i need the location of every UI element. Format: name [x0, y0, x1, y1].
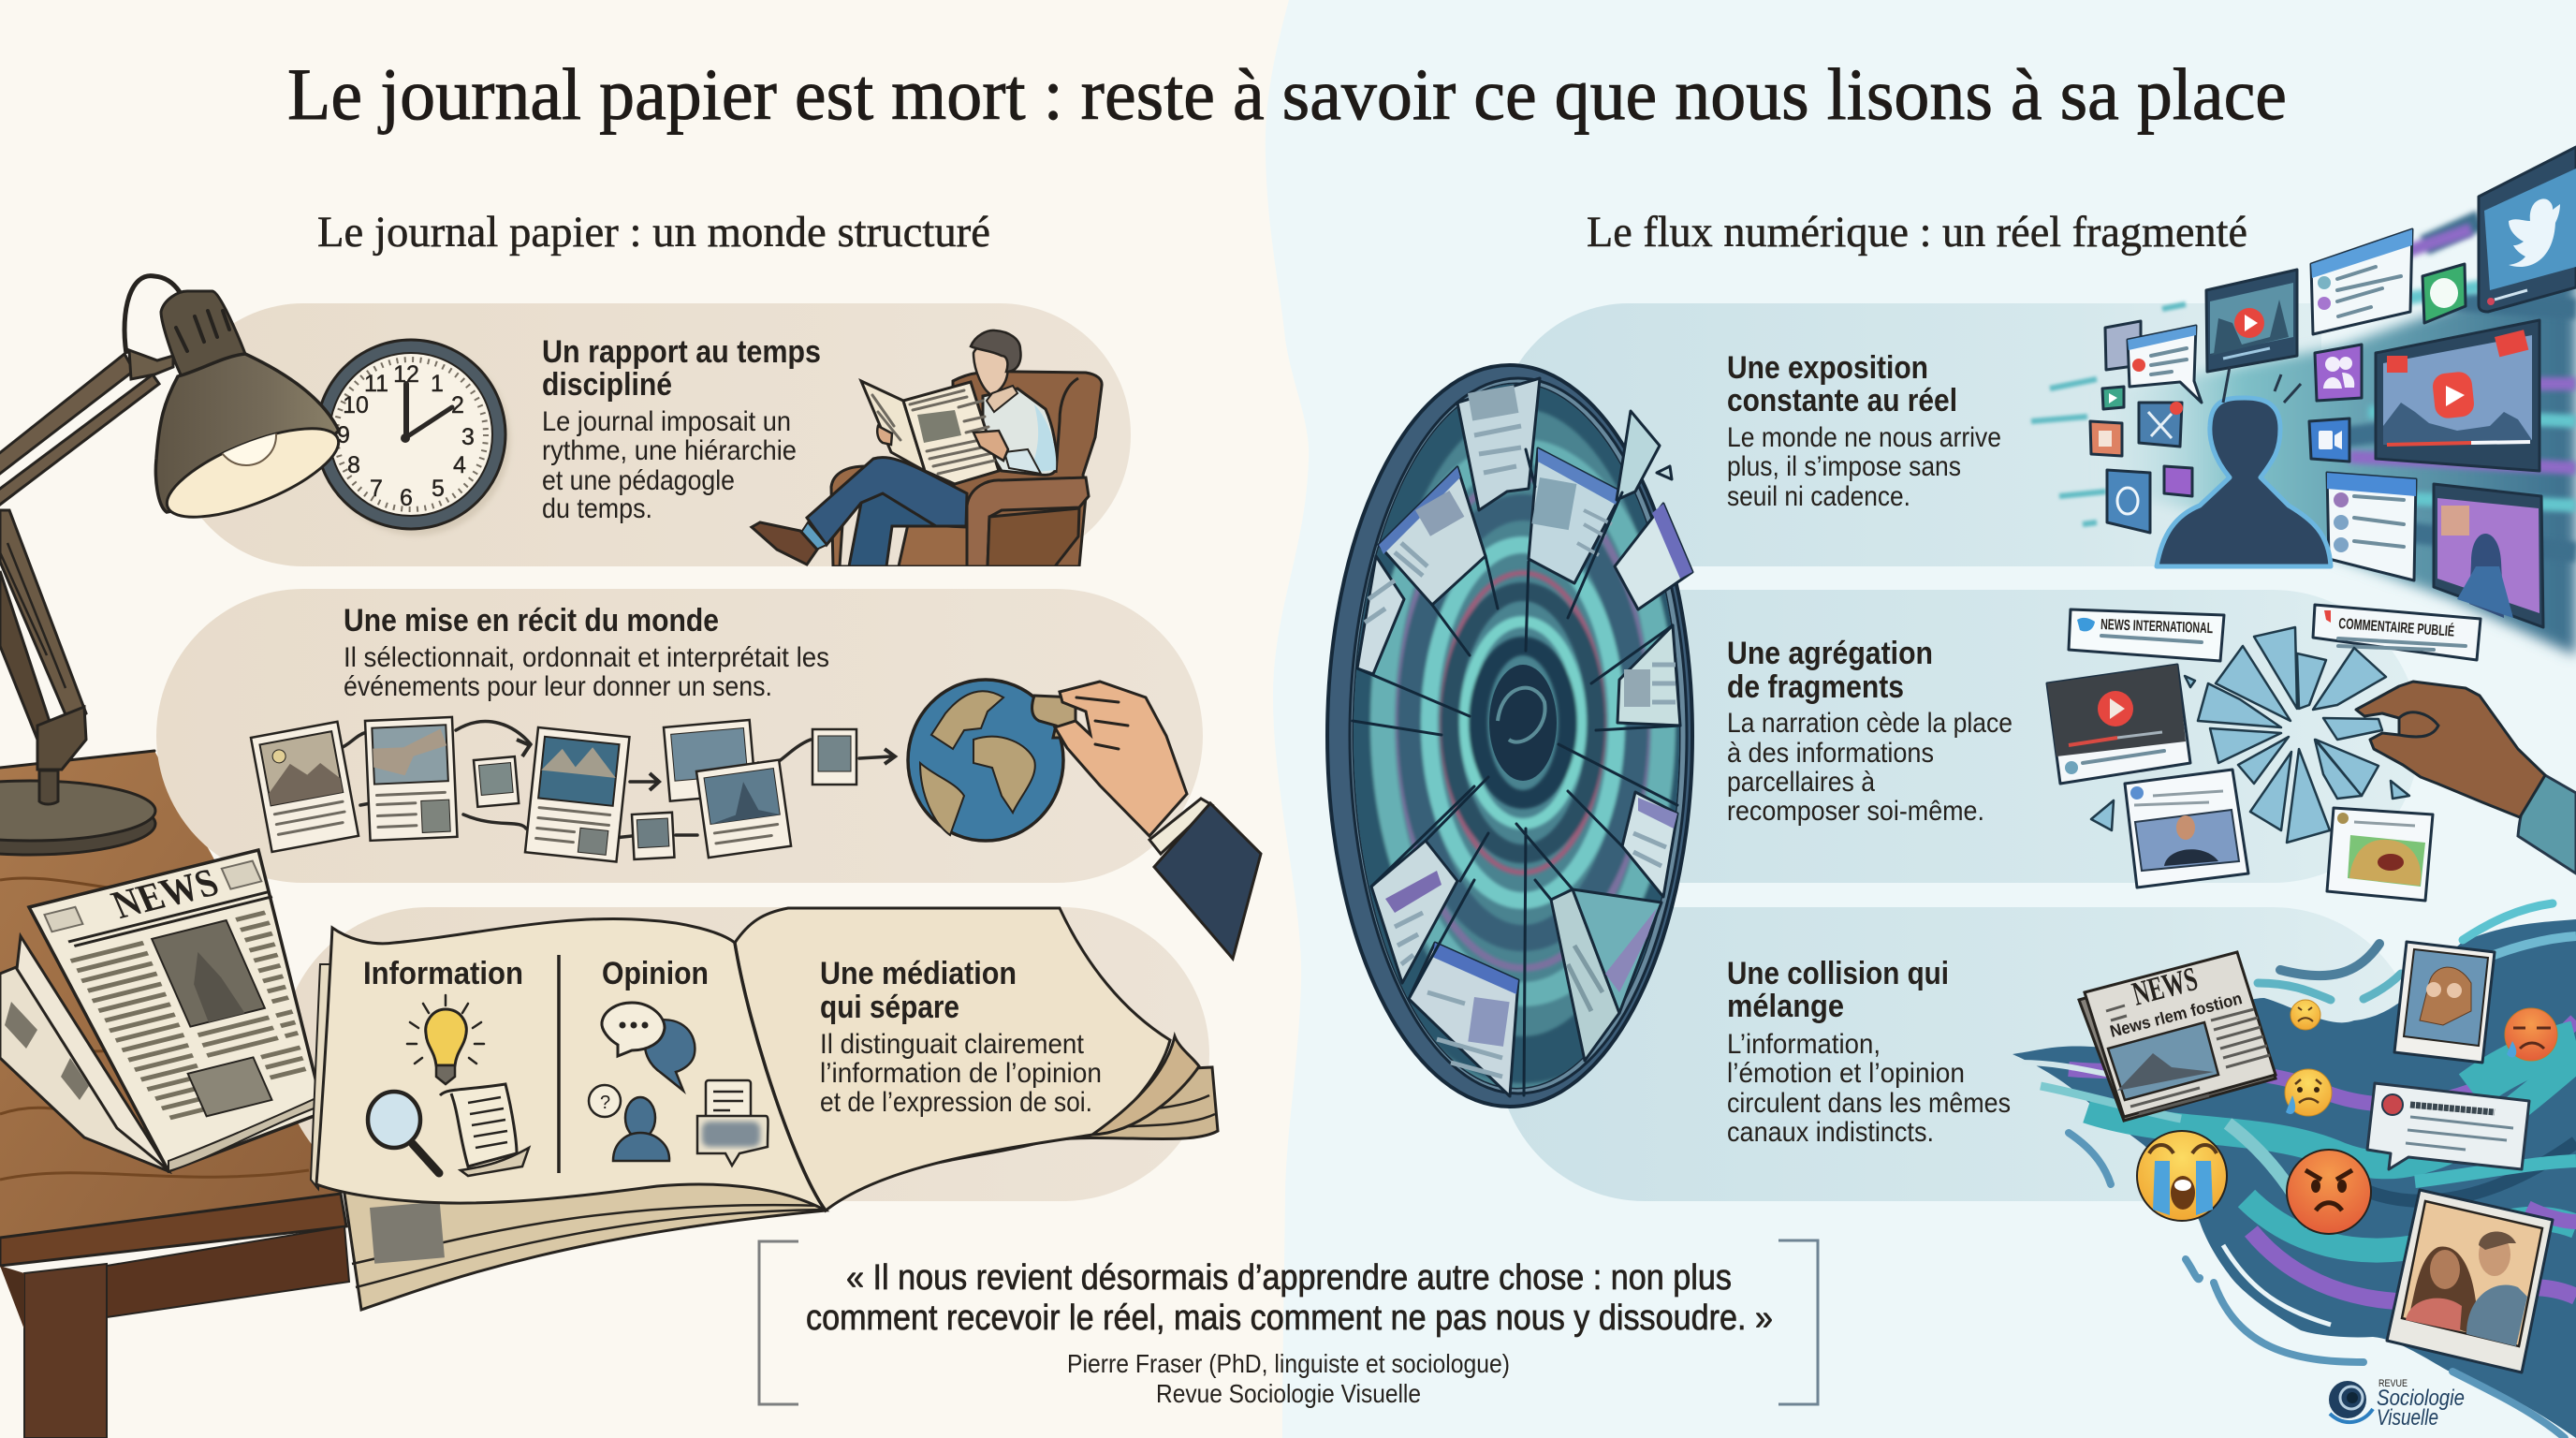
icon: news print on wave: News rlem fostion — [2108, 989, 2244, 1041]
text: mise en récit: Une mise en récit du monde — [344, 603, 719, 638]
text: mise en récit: événements pour leur donner un sens. — [344, 671, 772, 702]
background: digital side — [1266, 0, 2576, 1438]
icon: wall clock: 7 — [370, 476, 383, 502]
card: comment bubble — [2367, 1083, 2529, 1169]
icon: wall clock: 11 — [364, 371, 388, 397]
card: commentaire publié: COMMENTAIRE PUBLIÉ — [2338, 614, 2455, 640]
card: news international — [2069, 609, 2224, 661]
card: social post — [2311, 229, 2412, 334]
icon: person expressing opinion: ? — [600, 1093, 610, 1113]
text: rapport au temps: et une pédagogle — [542, 465, 735, 496]
text: agrégation: à des informations — [1727, 738, 1934, 769]
icon: wall clock: 1 — [431, 371, 444, 397]
text: mise en récit: Il sélectionnait, ordonnait et interprétait les — [344, 642, 829, 673]
text: rapport au temps: Un rapport au temps — [542, 334, 821, 370]
text: collision: L’information, — [1727, 1029, 1881, 1060]
card: news international: NEWS INTERNATIONAL — [2100, 617, 2214, 637]
icon: twitter screen — [2479, 147, 2576, 312]
text: collision: circulent dans les mêmes — [1727, 1088, 2011, 1119]
quote frame: left bracket — [759, 1241, 798, 1404]
icon: magnifier — [368, 1092, 439, 1173]
table — [0, 751, 349, 1438]
text: agrégation: La narration cède la place — [1727, 708, 2012, 739]
icon: news print on wave — [2079, 952, 2276, 1121]
icon: hand picking a shard — [2356, 682, 2576, 873]
illustration: shattered mirror with vortex — [1327, 365, 1694, 1107]
icon: group app — [2315, 345, 2362, 401]
text: information: Information — [363, 956, 523, 991]
icon: news print on wave: NEWS — [2129, 960, 2202, 1013]
icon: wall clock: 12 — [393, 361, 419, 388]
card: commentaire publié — [2313, 605, 2481, 660]
illustration: turbulent wave — [2012, 903, 2576, 1438]
text: exposition: seuil ni cadence. — [1727, 481, 1910, 512]
card: meme — [2327, 808, 2433, 901]
panel: agrégation — [1498, 590, 2420, 883]
text: exposition — [1727, 350, 2001, 512]
text: rapport au temps: rythme, une hiérarchie — [542, 435, 797, 466]
illustration: stacked newspapers — [0, 850, 353, 1171]
icon: wall clock: 9 — [337, 422, 350, 448]
text: collision: l’émotion et l’opinion — [1727, 1058, 1965, 1089]
icon: camera app — [2309, 418, 2349, 462]
text: exposition: Le monde ne nous arrive — [1727, 422, 2001, 453]
logo: Revue Sociologie Visuelle: Visuelle — [2377, 1405, 2438, 1431]
icon: shattered glass shards — [2091, 627, 2409, 843]
text: exposition: plus, il s’impose sans — [1727, 451, 1961, 482]
text: médiation: Il distinguait clairement — [820, 1029, 1085, 1060]
mirror fragments with articles — [1353, 378, 1692, 1096]
icon: wall clock: 3 — [461, 424, 475, 450]
text: rapport au temps: Le journal imposait un — [542, 406, 791, 437]
icon: speech bubbles — [602, 1003, 695, 1091]
icon: emoji group — [2137, 1000, 2557, 1234]
card: news anchor — [2125, 770, 2248, 888]
icon: small chat cards left of viewer — [2090, 321, 2301, 533]
icon: globe and puzzle piece — [908, 680, 1187, 841]
panel: collision — [1498, 907, 2420, 1201]
illustration: data stream behind screens — [2031, 220, 2576, 655]
text: agrégation: recomposer soi-même. — [1727, 796, 1984, 827]
icon: wall clock: 5 — [432, 476, 445, 502]
icon: wall clock — [316, 340, 510, 536]
icon: small video player — [2206, 270, 2297, 372]
text: exposition: Une exposition — [1727, 350, 1928, 386]
icon: person expressing opinion — [589, 1080, 768, 1166]
icon: light bulb — [407, 995, 484, 1084]
text: agrégation: de fragments — [1727, 669, 1904, 705]
text: rapport au temps — [542, 334, 821, 524]
card: video call — [2434, 484, 2543, 627]
attribution — [1067, 1349, 1510, 1408]
title: Le journal papier est mort : reste à savoir ce que nous lisons à sa place — [287, 53, 2287, 135]
card: photo of couple — [2387, 1190, 2553, 1372]
panel: rapport au temps — [172, 303, 1131, 566]
icon: desk lamp — [0, 276, 349, 855]
icon: wall clock: 8 — [347, 452, 360, 478]
text: médiation: Une médiation — [820, 956, 1017, 991]
quote text: comment recevoir le réel, mais comment ne pas nous y dissoudre. » — [806, 1299, 1773, 1338]
illustration: open book — [311, 908, 1218, 1310]
text: agrégation — [1727, 636, 2012, 827]
panel: médiation — [281, 907, 1209, 1201]
attribution: Pierre Fraser (PhD, linguiste et sociologue) — [1067, 1349, 1510, 1378]
illustration: man reading in armchair — [752, 330, 1102, 566]
icon: green message app — [2422, 264, 2466, 323]
text: médiation: l’information de l’opinion — [820, 1058, 1102, 1089]
attribution: Revue Sociologie Visuelle — [1156, 1379, 1421, 1408]
text: rapport au temps: discipliné — [542, 367, 672, 403]
icon: wall clock: 10 — [343, 392, 369, 418]
card: portrait polaroid — [2394, 942, 2495, 1063]
card: bottom post — [2327, 473, 2416, 580]
text: médiation: et de l’expression de soi. — [820, 1087, 1092, 1118]
text: collision: mélange — [1727, 989, 1844, 1024]
logo: Revue Sociologie Visuelle: Sociologie — [2377, 1386, 2465, 1411]
text: collision — [1727, 956, 2011, 1148]
heading: right column: Le flux numérique : un réel fragmenté — [1587, 208, 2247, 257]
logo: Revue Sociologie Visuelle: REVUE — [2378, 1378, 2408, 1389]
text: collision: canaux indistincts. — [1727, 1117, 1934, 1148]
quote frame: right bracket — [1778, 1240, 1818, 1404]
icon: wall clock: 2 — [451, 392, 464, 418]
illustration: chain of news cards with arrows — [251, 717, 895, 862]
text: collision: Une collision qui — [1727, 956, 1949, 991]
icon: suit sleeve — [1149, 799, 1261, 959]
text: mise en récit — [344, 603, 829, 702]
silhouette: viewer — [2157, 398, 2331, 566]
text: opinion: Opinion — [602, 956, 709, 991]
icon: video card — [2047, 665, 2190, 784]
text: rapport au temps: du temps. — [542, 493, 652, 524]
quote text — [806, 1258, 1773, 1338]
heading: left column: Le journal papier : un monde structuré — [317, 208, 990, 257]
text: exposition: constante au réel — [1727, 383, 1957, 418]
icon: large video player — [2376, 320, 2539, 471]
text: agrégation: parcellaires à — [1727, 767, 1875, 798]
icon: wall clock: 6 — [400, 485, 413, 511]
illustration: stacked newspapers: NEWS — [106, 860, 226, 927]
icon: paper scroll — [440, 1084, 529, 1176]
icon: wall clock: 4 — [453, 452, 466, 478]
text: médiation: qui sépare — [820, 990, 959, 1025]
panel: mise en récit — [156, 589, 1203, 883]
text: médiation — [820, 956, 1102, 1118]
panel: exposition — [1498, 303, 2321, 566]
logo: Revue Sociologie Visuelle — [2329, 1378, 2465, 1431]
quote text: « Il nous revient désormais d’apprendre autre chose : non plus — [846, 1258, 1732, 1298]
text: agrégation: Une agrégation — [1727, 636, 1933, 671]
